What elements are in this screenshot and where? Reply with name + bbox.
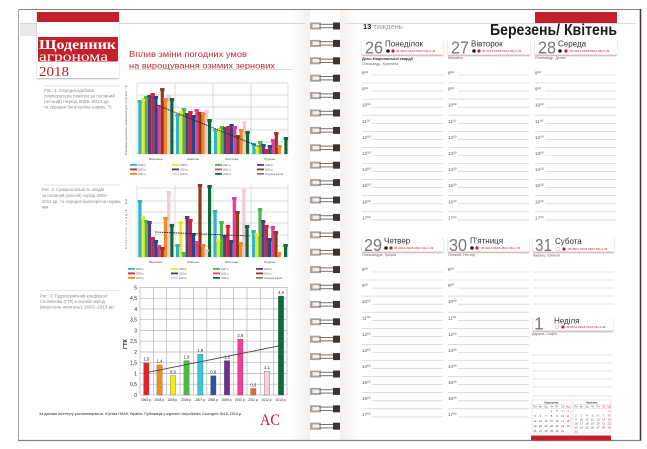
chart 2: precipitation bars: Листопад [225, 260, 238, 264]
legend chart 1: 2014 р. [180, 173, 189, 176]
hour labels top row: 15⁰⁰ [362, 183, 371, 188]
caption: figure 3 [40, 290, 120, 310]
legend chart 1: 2007 р. [223, 164, 232, 167]
mini calendar: Квітень: 21 [602, 422, 605, 426]
hour labels top row: 14⁰⁰ [448, 167, 457, 172]
mini calendar: Квітень: Нд [607, 404, 611, 408]
mini calendar: Березень: 30 [556, 429, 559, 433]
chart 3: hydrothermal coefficient bars: 2 [134, 350, 137, 356]
hour labels top row [362, 70, 544, 220]
mini calendar: Квітень: 1 [608, 409, 610, 413]
chart 3: hydrothermal coefficient bars: 2006 р. [181, 398, 192, 402]
mini calendar: Березень: 26 [534, 429, 537, 433]
logo: AC: AC [260, 412, 280, 429]
chart 2: precipitation bars: Кількість опадів, мм [124, 199, 128, 249]
hour labels top row: 13⁰⁰ [362, 151, 371, 156]
chart 3: hydrothermal coefficient bars: 0 [134, 393, 137, 399]
legend chart 1: 2013 р. [138, 173, 147, 176]
mini calendar: Квітень [573, 400, 611, 434]
mini calendar: Квітень: 30 [574, 430, 578, 434]
mini calendar: Квітень: 10 [580, 418, 583, 422]
schedule lines: 30 [448, 272, 529, 417]
mini calendar: Квітень: 19 [591, 422, 594, 426]
day header: 26 Понеділок: 05:49|12:34|18:20|12:31|+1:49 [396, 49, 436, 53]
chart 3: hydrothermal coefficient bars: 4,5 [130, 296, 137, 302]
chart 3: hydrothermal coefficient bars: 2012 р. [262, 398, 272, 402]
mini calendar: Березень: 12 [534, 419, 537, 423]
legend chart 2: 2010 р. [179, 272, 188, 275]
caption: figure 1 [44, 86, 120, 110]
hour labels top row: 11⁰⁰ [535, 119, 543, 124]
mini calendar: Березень: 14 [544, 419, 548, 423]
chart 2: precipitation bars: Вересень [149, 260, 163, 264]
chart 3: hydrothermal coefficient bars: 2,5 [130, 339, 137, 345]
day header: 27 Вівторок [448, 38, 530, 60]
mini calendar: Березень: 9 [556, 414, 558, 418]
day header: 1 Неділя: 05:36|12:33|18:31|12:54|+1:49 [566, 325, 606, 329]
hour labels top row: 16⁰⁰ [448, 200, 457, 204]
day header: 30 П'ятниця: 05:40|12:33|18:28|12:46|+1:49 [481, 246, 521, 250]
legend chart 1: 2012 р. [265, 168, 274, 171]
mini calendar: Березень: 18 [566, 419, 570, 423]
day header: 28 Середа: 05:44|12:34|18:25|12:38|+1:49 [570, 49, 610, 53]
mini calendar: Березень: 2 [556, 409, 558, 413]
mini calendar: Квітень: 12 [591, 418, 594, 422]
mini calendar: Квітень: Чт [591, 404, 595, 408]
hour labels top row: 8⁰⁰ [362, 70, 368, 76]
hour labels top row: 14⁰⁰ [535, 167, 544, 172]
hour labels top row: 14⁰⁰ [362, 167, 371, 172]
schedule lines: 26 [362, 75, 443, 220]
hour labels bottom row: 12⁰⁰ [362, 332, 371, 337]
caption: figure 2: за посівний (осінній) період 2005– [42, 192, 108, 198]
hour labels bottom row: 15⁰⁰ [362, 380, 371, 385]
legend chart 2: 2014 р. [179, 277, 188, 280]
day header: 28 Середа: 28 [538, 38, 556, 58]
schedule lines: 28 [535, 75, 616, 220]
mini calendar: Квітень: 11 [586, 418, 589, 422]
chart 3: hydrothermal coefficient bars: 1,4 [157, 358, 163, 364]
chart 3: hydrothermal coefficient bars: 2005 р. [168, 398, 178, 402]
legend chart 2: 2013 р. [136, 277, 145, 280]
mini calendar: Березень: Березень [544, 400, 559, 404]
day header: 30 П'ятниця: П'ятниця [470, 236, 503, 246]
hour labels top row: 16⁰⁰ [535, 200, 544, 204]
caption: figure 2: Рис. 2. Сумарна кількість опадів [42, 187, 104, 192]
chart 3: hydrothermal coefficient bars: 2011 р. [248, 398, 259, 402]
hour labels top row: 16⁰⁰ [362, 200, 371, 204]
mini calendar: Березень: 25 [566, 424, 570, 428]
chart 1: temperature bars: Жовтень [187, 157, 200, 161]
grey header rule right page [345, 22, 636, 24]
mini calendar: Квітень: 7 [603, 414, 605, 418]
hour labels top row: 9⁰⁰ [448, 86, 454, 92]
mini calendar: Березень: 5 [534, 414, 536, 418]
hour labels top row: 12⁰⁰ [362, 135, 371, 140]
day header: 31 Субота [533, 235, 614, 258]
caption: figure 2: 2013 рр. та середня багаторічна норма, [42, 199, 121, 204]
day header: 29 Четвер: Олександра, Тризна [362, 253, 396, 257]
legend chart 2: 2015 р. [221, 277, 230, 280]
hour labels bottom row: 17⁰⁰ [448, 412, 457, 417]
legend chart 2: 2007 р. [221, 268, 230, 271]
title card: Щоденник агронома 2018: 2018 [39, 65, 69, 80]
hour labels top row: 12⁰⁰ [448, 135, 457, 140]
day header: 27 Вівторок: Вівторок [471, 40, 503, 48]
day header: 30 П'ятниця: 30 [449, 235, 467, 255]
chart 3: hydrothermal coefficient bars: 3,5 [130, 318, 137, 324]
title card: Щоденник агронома 2018 [37, 11, 119, 80]
top red tab right page [535, 12, 617, 23]
chart 3: hydrothermal coefficient bars: 2013 р. [276, 398, 286, 402]
mini calendar: Березень: 27 [539, 429, 542, 433]
day header: 29 Четвер: Четвер [384, 236, 411, 246]
mini calendar: Квітень: Сб [602, 404, 606, 408]
hour labels bottom row: 12⁰⁰ [448, 332, 457, 337]
hour labels top row: 11⁰⁰ [362, 119, 370, 124]
day header: 1 Неділя: 1 [534, 314, 544, 334]
mini calendar: Березень: 1 [551, 409, 553, 413]
mini calendar: Березень: 28 [544, 429, 548, 433]
mini calendar: Березень: Чт [550, 404, 554, 408]
day header: 29 Четвер: 05:42|12:33|18:26|12:42|+1:49 [394, 246, 434, 250]
chart 3: hydrothermal coefficient bars: 0,5 [130, 382, 137, 388]
day header: 31 Субота: Субота [555, 237, 582, 246]
mini calendar: Березень: 29 [550, 429, 553, 433]
title card: Щоденник агронома 2018: Щоденник [39, 37, 116, 52]
mini calendar: Березень: 4 [567, 409, 569, 413]
chart 1: temperature bars [124, 83, 288, 161]
mini calendar: Березень: 6 [540, 414, 542, 418]
legend chart 1: Середня норма [265, 173, 284, 176]
hour labels bottom row: 13⁰⁰ [362, 348, 371, 353]
chart 2: precipitation bars: Грудень [264, 260, 276, 264]
caption: figure 1: Рис. 1. Середньодобова [44, 88, 94, 93]
day header: 31 Субота: Кирило, Євтихія [533, 254, 560, 258]
sunday note lines [532, 355, 612, 396]
caption: figure 1: температура повітря за посівний [44, 92, 115, 98]
chart 3: hydrothermal coefficient bars: 4,6 [278, 290, 285, 295]
week label: 13 тиждень [363, 22, 403, 31]
mini calendar: Березень: Сб [561, 404, 565, 408]
hour labels bottom row: 17⁰⁰ [362, 412, 371, 417]
mini calendar: Квітень: 27 [596, 426, 600, 430]
caption: figure 1: (осінній) період 2005–2013 рр. [44, 98, 110, 104]
mini calendar: Березень: 7 [545, 414, 547, 418]
day header: 27 Вівторок: Михайло [448, 56, 463, 60]
mini calendar: Березень: 22 [550, 424, 553, 428]
chart 3: hydrothermal coefficient bars: 2004 р. [154, 398, 165, 402]
article heading: Вплив зміни погодних умов [129, 49, 248, 59]
chart 3: hydrothermal coefficient bars: 1,5 [143, 356, 150, 362]
mini calendar: Квітень: 24 [580, 426, 583, 430]
hour labels bottom row [362, 267, 457, 417]
legend chart 1: 2005 р. [138, 164, 147, 167]
legend chart 2: 2012 р. [264, 272, 273, 275]
caption: figure 3: Селянінова (ГТК) в осінній період [40, 298, 105, 304]
legend chart 2: 2008 р. [264, 268, 273, 271]
chart 3: hydrothermal coefficient bars: ГТК [123, 339, 129, 349]
day header: 28 Середа: Олександр, Денис [535, 56, 566, 60]
mini calendar: Березень: Нд [566, 404, 570, 408]
mini calendar: Березень: 24 [561, 424, 564, 428]
chart 3: hydrothermal coefficient bars: 2003 р. [141, 398, 152, 402]
hour labels top row: 13⁰⁰ [535, 151, 544, 156]
chart 3: hydrothermal coefficient bars: 2008 р. [208, 398, 219, 402]
legend chart 1: 2008 р. [265, 164, 274, 167]
legend chart 1 [130, 164, 284, 176]
hour labels bottom row: 9⁰⁰ [362, 283, 368, 288]
chart 3: hydrothermal coefficient bars: 4 [134, 307, 137, 313]
mini calendar: Квітень: Квітень [586, 400, 598, 404]
schedule lines: 29 [362, 272, 443, 417]
hour labels bottom row: 15⁰⁰ [448, 380, 457, 385]
hour labels bottom row: 16⁰⁰ [448, 396, 457, 401]
legend chart 2: 2005 р. [136, 268, 145, 271]
mini calendar: Квітень: 15 [608, 418, 611, 422]
mini calendar: Березень: 16 [556, 419, 559, 423]
mini calendar: Березень: 10 [561, 414, 564, 418]
mini calendar: Березень: Пт [555, 404, 559, 408]
mini calendar: Березень: 11 [567, 414, 570, 418]
article heading: на вирощування озимих зернових [129, 60, 276, 70]
day header: 29 Четвер [362, 235, 443, 257]
mini calendar: Квітень: 23 [574, 426, 578, 430]
day header: 26 Понеділок: Понеділок [385, 40, 424, 48]
hour labels top row: 17⁰⁰ [535, 216, 544, 220]
chart 3: hydrothermal coefficient bars [123, 286, 287, 402]
mini calendar: Березень: 31 [561, 429, 564, 433]
legend chart 1: 2009 р. [138, 168, 147, 171]
day header: 28 Середа: Середа [558, 40, 587, 48]
hour labels top row: 15⁰⁰ [535, 183, 544, 188]
mini calendar: Квітень: 22 [608, 422, 611, 426]
mini calendar: Квітень: 16 [574, 422, 578, 426]
mini calendar: Квітень: 18 [586, 422, 589, 426]
mini calendar: Березень: 8 [551, 414, 553, 418]
chart 3: hydrothermal coefficient bars: 0,9 [210, 370, 217, 374]
legend chart 1: 2011 р. [223, 168, 231, 171]
chart 3: hydrothermal coefficient bars: 1,9 [197, 348, 204, 353]
schedule lines: 31 [533, 272, 614, 304]
mini calendar: Березень: 19 [534, 424, 537, 428]
hour labels bottom row: 13⁰⁰ [448, 348, 457, 353]
chart 3: hydrothermal coefficient bars: 2010 р. [235, 398, 246, 402]
legend chart 2: 2009 р. [136, 272, 145, 275]
chart 3: hydrothermal coefficient bars: 1,1 [264, 365, 271, 370]
mini calendar: Квітень: 4 [586, 414, 588, 418]
chart 1: temperature bars: Середньодобова температура повітря, °С [124, 84, 128, 155]
hour labels bottom row: 11⁰⁰ [448, 316, 456, 320]
chart 1: temperature bars: Листопад [225, 157, 238, 161]
caption: figure 1: та середня багаторічна норма, °С [44, 104, 113, 110]
hour labels bottom row: 14⁰⁰ [362, 364, 371, 369]
mini calendar: Березень: Ср [544, 404, 548, 408]
mini calendar: Квітень: 14 [602, 418, 605, 422]
day header: 30 П'ятниця: Олексій, Нестор [448, 253, 475, 257]
hour labels top row: 10⁰⁰ [362, 102, 371, 108]
day header: 1 Неділя: Неділя [554, 316, 580, 326]
day header: 27 Вівторок: 05:47|12:34|18:22|12:35|+1:49 [482, 49, 522, 53]
title card: Щоденник агронома 2018: агронома [39, 49, 108, 64]
source note: За даними Інституту рослинництва ім. Юр'єва НААН України. Публікація у журналі «Агробізнес Сьогодні» №18, 2014 р. [39, 411, 242, 416]
mini calendar: Квітень: 8 [608, 414, 610, 418]
mini calendar: Квітень: Пт [596, 404, 600, 408]
hour labels top row: 17⁰⁰ [362, 216, 371, 220]
hour labels top row: 9⁰⁰ [535, 86, 541, 92]
month heading: Березень/ Квітень [490, 22, 617, 39]
mini calendar: Березень: 23 [556, 424, 559, 428]
chart 3: hydrothermal coefficient bars: 0,9 [170, 370, 176, 374]
mini calendar: Березень: 13 [539, 419, 542, 423]
day header: 30 П'ятниця [448, 235, 529, 257]
spiral binding [310, 22, 340, 430]
hour labels bottom row: 16⁰⁰ [362, 396, 371, 401]
chart 3: hydrothermal coefficient bars: 2007 р. [195, 398, 206, 402]
legend chart 1: 2010 р. [180, 168, 189, 171]
mini calendar: Квітень: 9 [575, 418, 577, 422]
mini calendar: Березень: Пн [533, 404, 537, 408]
mini calendar: Квітень: 28 [602, 426, 605, 430]
chart 3: hydrothermal coefficient bars: 2009 р. [222, 398, 232, 402]
day header: 29 Четвер: 29 [364, 235, 382, 255]
mini calendar: Березень: 20 [539, 424, 542, 428]
chart 3: hydrothermal coefficient bars: 1,6 [184, 354, 190, 360]
mini calendar: Березень: 15 [550, 419, 553, 423]
mini calendar: Квітень: Пн [574, 404, 578, 408]
chart 1: temperature bars: Грудень [264, 157, 276, 161]
day header: 26 Понеділок: День Національної гвардії [362, 56, 414, 61]
hour labels bottom row: 14⁰⁰ [448, 364, 457, 369]
legend chart 2: 2011 р. [221, 272, 229, 275]
chart 2: precipitation bars: Жовтень [187, 260, 200, 264]
schedule lines: 27 [448, 75, 529, 220]
hour labels bottom row: 10⁰⁰ [448, 299, 457, 304]
bottom red tab [531, 436, 611, 440]
mini calendar: Березень: 21 [544, 424, 548, 428]
hour labels bottom row: 8⁰⁰ [362, 267, 368, 272]
hour labels top row: 15⁰⁰ [448, 183, 457, 188]
day header: 26 Понеділок: Олександр, Христина [362, 62, 398, 66]
mini calendar: Квітень: 2 [575, 414, 577, 418]
mini calendar: Квітень: 25 [586, 426, 589, 430]
day header: 1 Неділя: Дарина, Софія [532, 332, 557, 336]
chart 3: hydrothermal coefficient bars: 3 [134, 328, 137, 334]
mini calendar: Квітень: Вт [580, 404, 584, 408]
caption: figure 3: Рис. 3. Гідротермічний коефіцієнт [40, 292, 109, 298]
mini calendar: Березень: 17 [561, 419, 564, 423]
hour labels top row: 12⁰⁰ [535, 135, 544, 140]
grey header band left page [20, 23, 305, 36]
hour labels top row: 8⁰⁰ [448, 70, 454, 76]
mini calendar: Квітень: 13 [596, 418, 600, 422]
mini calendar: Квітень: 26 [591, 426, 594, 430]
mini calendar: Квітень: 3 [581, 414, 583, 418]
day header: 31 Субота: 05:38|12:33|18:29|12:50|+1:49 [568, 247, 608, 251]
hour labels top row: 9⁰⁰ [362, 86, 368, 92]
day header: 31 Субота: 31 [535, 235, 552, 255]
caption: figure 3: (вересень-жовтень), 2003–2013 рр. [40, 304, 115, 310]
hour labels top row: 13⁰⁰ [448, 151, 457, 156]
legend chart 2: Середня норма [264, 277, 283, 280]
mini calendar: Квітень: 20 [596, 422, 600, 426]
mini calendar: Березень: 3 [562, 409, 564, 413]
caption: figure 2 [42, 185, 121, 210]
legend chart 2: 2006 р. [179, 268, 188, 271]
day header: 1 Неділя [532, 314, 613, 336]
hour labels top row: 8⁰⁰ [535, 70, 541, 76]
hour labels top row: 11⁰⁰ [448, 119, 456, 124]
chart 2: precipitation bars [124, 184, 288, 264]
legend chart 2 [128, 268, 283, 280]
article heading [129, 49, 294, 70]
mini calendar: Квітень: 5 [592, 414, 594, 418]
mini calendar: Березень [532, 400, 571, 433]
hour labels bottom row: 8⁰⁰ [448, 267, 454, 272]
chart 3: hydrothermal coefficient bars: 1,5 [130, 360, 137, 366]
hour labels top row: 10⁰⁰ [535, 102, 544, 108]
chart 3: hydrothermal coefficient bars: 1,6 [224, 354, 231, 360]
mini calendar: Квітень: 29 [608, 426, 611, 430]
hour labels bottom row: 10⁰⁰ [362, 299, 371, 304]
day header: 26 Понеділок: 26 [365, 38, 383, 58]
day header: 27 Вівторок: 27 [451, 38, 469, 58]
legend chart 1: 2015 р. [223, 173, 232, 176]
chart 3: hydrothermal coefficient bars: 0,3 [250, 382, 257, 388]
chart 3: hydrothermal coefficient bars: 5 [134, 286, 137, 292]
chart 1: temperature bars: Вересень [149, 157, 163, 161]
mini calendar: Квітень: Ср [585, 404, 589, 408]
chart 3: hydrothermal coefficient bars: 2,6 [237, 333, 244, 338]
day header: 26 Понеділок [362, 38, 443, 66]
mini calendar: Квітень: 6 [597, 414, 599, 418]
hour labels top row: 17⁰⁰ [448, 216, 457, 220]
hour labels bottom row: 9⁰⁰ [448, 283, 454, 288]
hour labels top row: 10⁰⁰ [448, 102, 457, 108]
mini calendar: Березень: Вт [539, 404, 543, 408]
hour labels bottom row: 11⁰⁰ [362, 316, 370, 320]
chart 3: hydrothermal coefficient bars: 1 [134, 372, 137, 378]
caption: figure 2: мм [42, 204, 48, 210]
mini calendar: Квітень: 17 [580, 422, 583, 426]
legend chart 1: 2006 р. [180, 164, 189, 167]
day header: 28 Середа [535, 38, 617, 60]
